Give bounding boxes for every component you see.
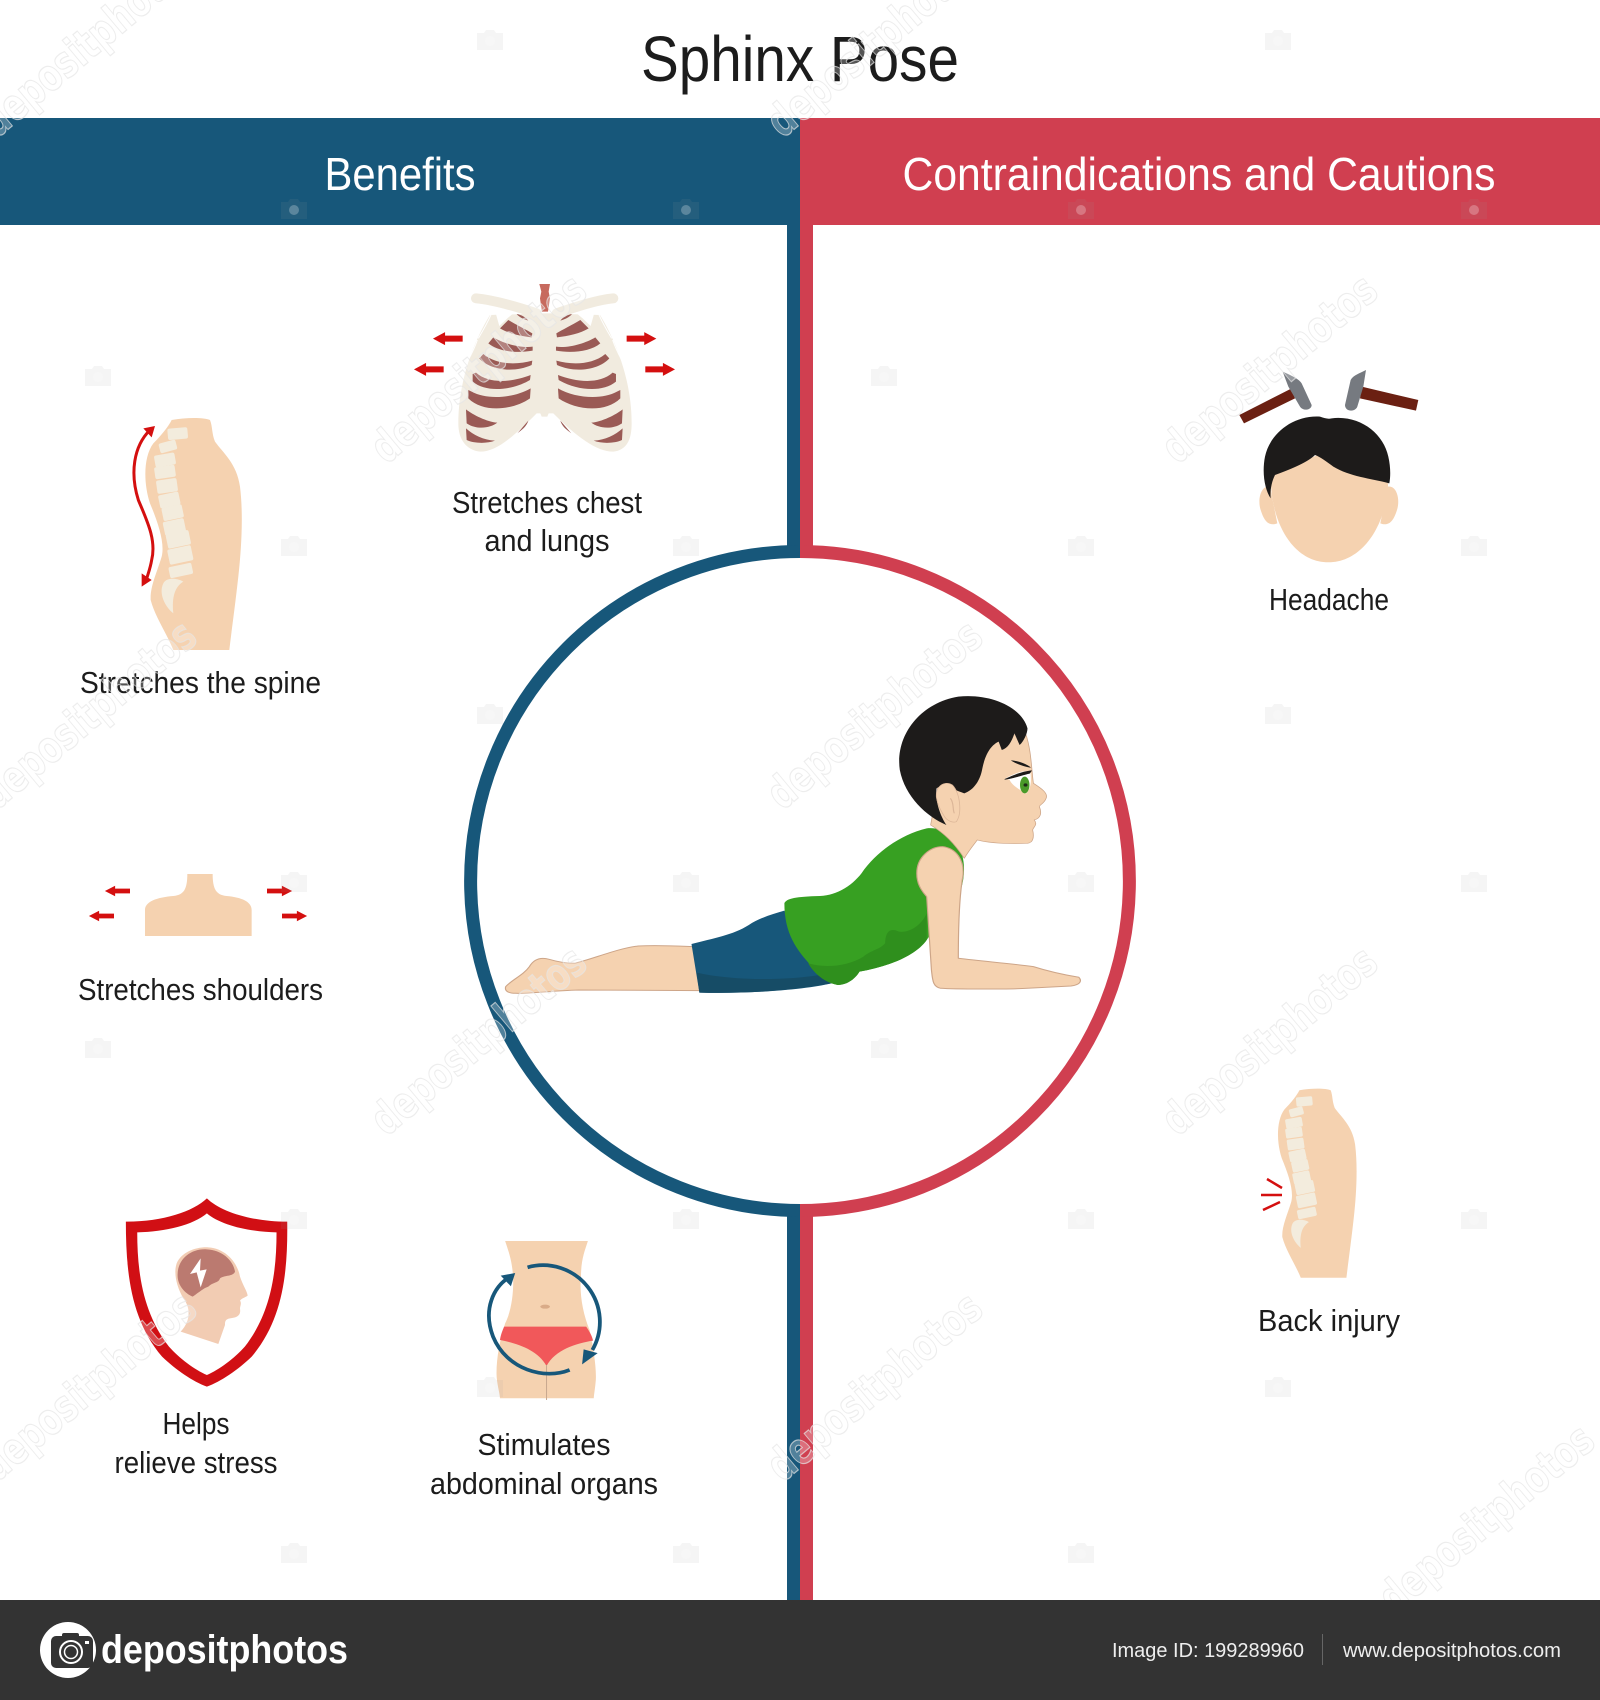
watermark overlay: depositphotos	[361, 936, 597, 1146]
left hammer	[1239, 372, 1312, 423]
label: helps relieve stress: Helps	[162, 1406, 230, 1441]
label: stimulates abdominal organs: abdominal organs	[430, 1466, 658, 1501]
rotation arrows	[489, 1265, 600, 1374]
brain	[178, 1249, 235, 1297]
image id: Image ID: 199289960	[1112, 1640, 1304, 1662]
label: stretches chest and lungs: and lungs	[484, 523, 610, 558]
figure: child in sphinx pose	[505, 696, 1080, 993]
watermark overlay: depositphotos	[1152, 264, 1388, 474]
hair	[899, 696, 1027, 825]
curved double arrow	[134, 426, 155, 587]
footer bar	[0, 1600, 1600, 1700]
icon: spine with stretch arrow	[134, 418, 242, 650]
logo wordmark: depositphotos	[101, 1628, 348, 1672]
shorts	[691, 911, 832, 993]
icon: abdomen with rotating arrows	[489, 1241, 600, 1400]
watermark overlay: depositphotos	[757, 1282, 993, 1492]
label: helps relieve stress	[114, 1406, 278, 1480]
torso	[497, 1241, 596, 1398]
arm and hand	[917, 847, 1080, 989]
watermark overlay: depositphotos	[1152, 936, 1388, 1146]
ear	[936, 783, 960, 822]
icon: back injury spine	[1261, 1089, 1357, 1278]
label: stretches the spine: Stretches the spine	[80, 665, 321, 700]
central divider bars	[787, 225, 813, 1600]
eye	[1005, 761, 1031, 793]
icon: rib cage with arrows	[414, 284, 675, 452]
website: www.depositphotos.com	[1342, 1640, 1561, 1662]
navel and line	[540, 1305, 550, 1400]
leg and foot	[505, 946, 701, 993]
label: headache: Headache	[1269, 582, 1389, 617]
pain marks	[1261, 1179, 1282, 1210]
underwear	[500, 1327, 593, 1366]
bones	[458, 298, 632, 452]
head	[175, 1247, 248, 1344]
central circle ring	[471, 552, 1129, 1210]
spine top	[539, 284, 550, 312]
heading: benefits: Benefits	[324, 148, 476, 200]
ears and face	[1259, 450, 1398, 562]
icon: camera logo	[40, 1622, 96, 1678]
watermark overlay: depositphotos	[361, 264, 597, 474]
right hammer	[1345, 370, 1418, 411]
title: Sphinx Pose	[641, 23, 959, 95]
icon: shoulders with arrows	[89, 874, 307, 936]
label: stretches chest and lungs: Stretches chest	[452, 485, 642, 520]
left rib muscles	[466, 314, 533, 443]
icon: headache head with hammers	[1239, 370, 1418, 562]
lightning bolt	[190, 1258, 207, 1287]
hair	[1264, 417, 1390, 498]
label: stretches chest and lungs	[452, 485, 642, 558]
panel: benefits header	[0, 118, 800, 225]
shirt	[784, 828, 964, 985]
right rib muscles	[556, 314, 623, 443]
panel: contraindications header	[800, 118, 1600, 225]
label: stimulates abdominal organs: Stimulates	[478, 1427, 610, 1462]
stretch arrows	[414, 332, 675, 376]
heading: contraindications and cautions: Contraindications and Cautions	[902, 148, 1496, 200]
label: back injury: Back injury	[1258, 1303, 1400, 1338]
face and neck	[931, 733, 1047, 858]
icon: shield with head	[126, 1198, 287, 1387]
watermark overlay: depositphotos	[757, 610, 993, 820]
label: helps relieve stress: relieve stress	[114, 1445, 278, 1480]
label: stimulates abdominal organs	[430, 1427, 658, 1501]
label: stretches shoulders: Stretches shoulders	[78, 972, 323, 1007]
